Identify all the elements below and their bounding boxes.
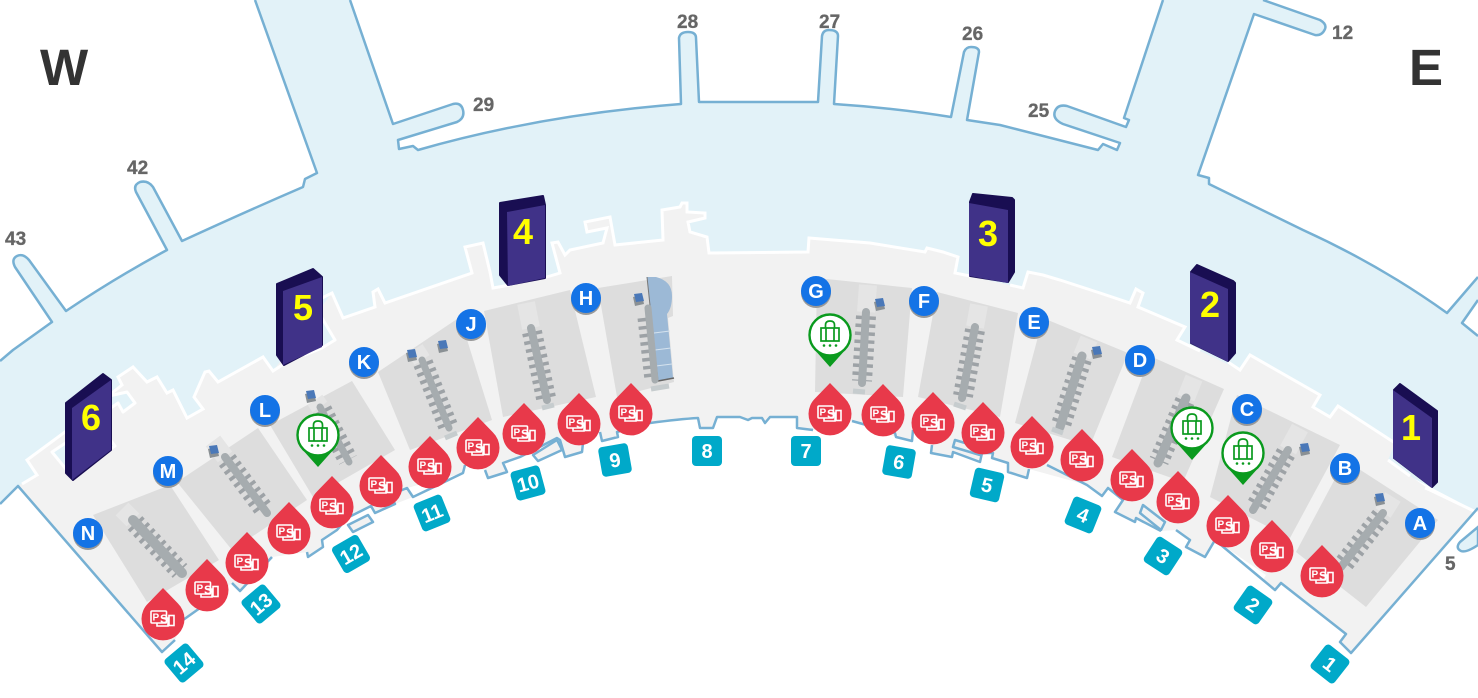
P/S red markers: P [620,408,628,418]
P/S red markers: S [329,500,337,514]
teal gate number tags: 13 [246,589,277,620]
outer pier gate labels: 26 [962,24,983,45]
P/S red markers: S [244,556,252,570]
P/S red markers: P [514,428,520,438]
P/S red markers: P [1312,570,1318,580]
P/S red markers: S [204,583,212,597]
P/S red markers: S [576,417,584,431]
P/S red markers: S [521,427,529,441]
P/S red markers: P [922,416,930,428]
baggage pin L [298,414,338,467]
concourse letter markers: K [357,352,372,374]
blue lounge squares [208,293,1385,506]
apron water area [0,0,1478,512]
tower 6 [66,374,111,480]
P/S red markers: P [1072,454,1078,464]
tower 2 [1190,265,1235,362]
P/S red markers: P [196,584,204,594]
P/S red markers: S [1129,473,1137,487]
P/S red markers: P [1262,544,1268,556]
tower 2: 2 [1200,284,1220,325]
H concourse glass hall [647,277,674,381]
baggage pin G [810,314,850,367]
water area outline [0,0,1478,361]
tower 4: 4 [513,211,533,252]
P/S red markers: P [236,556,244,568]
outer pier gate labels: 42 [127,158,148,179]
concourse letter markers: F [918,291,930,313]
baggage pin C [1222,432,1264,485]
concourse letter markers: M [160,461,176,483]
teal gate number tags: 10 [515,470,542,497]
concourse letter markers: C [1240,399,1254,421]
P/S red markers: S [1079,453,1087,467]
terminal landside outline [22,203,1476,512]
teal gate number tags [163,436,1351,685]
tower 1 [1393,384,1437,488]
P/S red markers: S [1175,495,1183,509]
concourse letter markers: E [1027,312,1041,334]
concourse letter markers: B [1338,458,1352,480]
baggage pin D [1172,408,1212,460]
P/S red markers [142,383,1344,640]
concourse letter markers: G [808,281,824,303]
boarding bridges [348,440,1165,532]
P/S red markers: S [827,407,835,421]
P/S red markers: S [1319,569,1327,583]
outer pier gate labels [5,12,1456,575]
west compass label: W [40,39,89,96]
P/S red markers: P [820,408,826,418]
tower 6: 6 [81,397,101,438]
teal gate number tags: 12 [336,540,367,570]
P/S red markers: P [420,460,426,472]
pier 5 stub [1458,527,1478,551]
concourse letter markers: N [81,523,95,545]
outer pier gate labels: 25 [1028,101,1050,122]
P/S red markers: S [628,407,636,421]
P/S red markers: P [278,526,286,538]
P/S red markers: P [1022,440,1028,452]
P/S red markers: S [980,426,988,440]
teal gate number tags: 1 [1318,653,1341,677]
outer pier gate labels: 43 [5,229,26,250]
teal gate number tags: 3 [1152,545,1173,569]
teal gate number tags: 5 [979,474,995,498]
tower 4 [500,196,545,286]
P/S red markers: S [1029,440,1037,454]
P/S red markers: S [475,441,483,455]
P/S red markers: P [370,480,378,490]
tower 3: 3 [978,213,998,254]
outer pier gate labels: 29 [473,95,494,116]
concourse blocks [93,276,1438,607]
P/S red markers: S [286,526,294,540]
east compass label: E [1409,39,1443,96]
concourse letter markers: A [1413,513,1427,535]
P/S red markers: P [1218,520,1224,530]
gate spines [133,308,1383,573]
spine end pads [445,386,1063,438]
teal gate number tags: 4 [1073,504,1093,529]
tower 5: 5 [293,287,313,328]
outer pier gate labels: 12 [1332,23,1353,44]
P/S red markers: P [972,426,980,438]
P/S red markers: P [1122,474,1128,484]
teal gate number tags: 11 [418,500,446,528]
outer pier gate labels: 27 [819,12,840,33]
tower 3 [969,194,1014,283]
teal gate number tags: 9 [608,449,623,473]
concourse letter markers: D [1133,350,1147,372]
outer pier gate labels: 5 [1445,554,1456,575]
P/S red markers: P [322,500,328,512]
water pockets around towers [52,310,335,474]
P/S red markers: P [468,442,474,452]
security zones above piers [122,285,1393,520]
teal gate number tags: 6 [891,451,906,475]
concourse letter markers: L [259,400,271,422]
P/S red markers: P [1168,496,1174,506]
P/S red markers: S [930,416,938,430]
teal gate number tags: 14 [169,648,201,679]
concourse letter markers: J [465,314,477,336]
terminal building floor [18,203,1478,653]
concourse letter markers: H [579,288,593,310]
P/S red markers: P [872,408,880,420]
tower 5 [277,269,322,365]
P/S red markers: S [427,460,435,474]
teal gate number tags: 7 [800,441,812,463]
P/S red markers: S [1225,519,1233,533]
P/S red markers: S [880,408,888,422]
P/S red markers: P [152,612,160,624]
P/S red markers: S [1269,544,1277,558]
P/S red markers: P [568,418,576,428]
tower 1: 1 [1401,407,1421,448]
teal gate number tags: 8 [701,441,713,463]
terminal airside outline [0,417,1478,653]
P/S red markers: S [160,612,168,626]
outer pier gate labels: 28 [677,12,698,33]
teal gate number tags: 2 [1242,594,1263,618]
P/S red markers: S [378,479,386,493]
concourse letter markers [73,276,1435,550]
